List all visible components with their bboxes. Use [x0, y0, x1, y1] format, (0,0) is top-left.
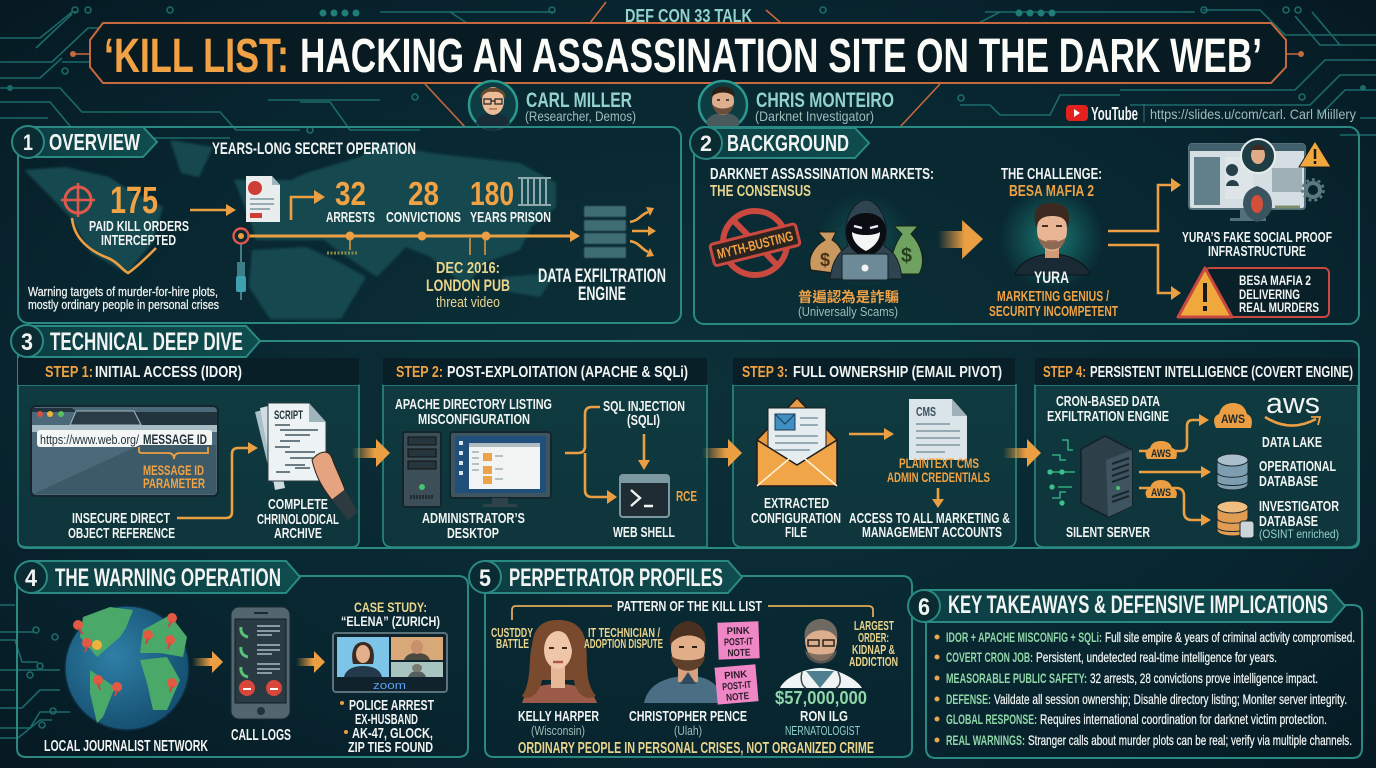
arrow: step 1 to step 2: [352, 439, 390, 467]
stat: arrests: ARRESTS: [326, 209, 375, 226]
label: ron ilg: NERNATOLOGIST: [785, 723, 860, 738]
label: insecure direct object reference: OBJECT REFERENCE: [68, 525, 175, 542]
icon: myth-busting stamp: [710, 211, 800, 275]
label: rce: RCE: [676, 488, 697, 505]
label: operational database: OPERATIONAL: [1259, 458, 1336, 475]
step 3 heading: STEP 3:: [742, 364, 788, 381]
label: administrators desktop: [422, 510, 525, 542]
label: ron ilg: [785, 708, 860, 738]
icon: cms document: [909, 399, 967, 460]
heading: the challenge: BESA MAFIA 2: [1009, 183, 1094, 200]
label: investigator database: DATABASE: [1259, 513, 1318, 530]
label: administrators desktop: DESKTOP: [447, 525, 499, 542]
portrait: kelly harper: [522, 620, 597, 703]
heading: the challenge: THE CHALLENGE:: [1001, 166, 1102, 183]
stat: convictions: 28: [408, 175, 439, 212]
label: extracted configuration file: FILE: [785, 524, 807, 541]
section tab: technical deep dive: [11, 325, 260, 357]
label: data exfiltration engine: ENGINE: [578, 284, 626, 305]
section tab: technical deep dive: 3: [21, 329, 33, 356]
label: it technician: IT TECHNICIAN /: [588, 626, 660, 640]
text: warning targets: Warning targets of murder-for-hire plots,: [28, 284, 218, 299]
list item: covert cron job: [934, 649, 1277, 665]
section tab: perpetrator profiles: [469, 561, 742, 593]
icon: browser url: PARAMETER: [143, 475, 205, 491]
label: local journalist network: LOCAL JOURNALIST NETWORK: [44, 738, 208, 755]
section tab: background: BACKGROUND: [727, 130, 849, 156]
arrow: aws to data lake: [1139, 414, 1209, 451]
icon: aws cloud: [1146, 441, 1177, 460]
list item: idor: [934, 629, 1355, 645]
timeline: [234, 228, 580, 255]
portrait: yura: YURA: [1034, 268, 1069, 287]
label: fake social proof: [1182, 229, 1332, 260]
icon: browser url: MESSAGE ID: [143, 431, 207, 447]
label: data exfiltration engine: DATA EXFILTRATION: [538, 266, 666, 287]
arrow: to fake infrastructure: [1108, 178, 1181, 231]
icon: aws cloud: [1146, 480, 1177, 499]
list item: global response: GLOBAL RESPONSE:: [946, 711, 1037, 727]
section tab: key takeaways: 6: [918, 594, 930, 621]
icon: investigator database: [1217, 501, 1254, 538]
label: web shell: WEB SHELL: [613, 524, 675, 541]
section tab: warning operation: [15, 561, 300, 593]
talk label: DEF CON 33 TALK: [625, 6, 752, 26]
youtube link: YouTube: [1091, 104, 1138, 124]
portrait: yura: [1000, 186, 1104, 290]
label: fake social proof: INFRASTRUCTURE: [1208, 243, 1306, 260]
label: marketing genius: MARKETING GENIUS /: [997, 288, 1110, 305]
label: christopher pence: CHRISTOPHER PENCE: [629, 708, 747, 725]
label: extracted configuration file: CONFIGURATION: [751, 510, 841, 527]
note: pink post-it: [717, 621, 760, 660]
arrow: step 3 to step 4: [1003, 439, 1041, 467]
list: case outcomes: ZIP TIES FOUND: [348, 739, 433, 756]
stat: convictions: [386, 175, 461, 226]
stat: 175 kill orders: [89, 180, 189, 249]
note: pink post-it: NOTE: [726, 691, 750, 704]
arrow: to real murders: [1108, 245, 1181, 300]
label: complete chronological archive: COMPLETE: [268, 496, 328, 513]
icon: document: [246, 176, 280, 222]
label: largest order: ADDICTION: [849, 655, 898, 669]
label: apache misconfiguration: [395, 396, 552, 428]
section tab: background: [690, 127, 869, 159]
heading: darknet markets: THE CONSENSUS: [710, 183, 811, 200]
arrow: to operational database: [1139, 466, 1211, 478]
step 2 heading: [396, 364, 688, 381]
label: insecure direct object reference: INSECURE DIRECT: [72, 510, 170, 527]
icon: zoom call: [333, 633, 447, 692]
icon: aws cloud: AWS: [1151, 487, 1171, 499]
conclusion: ordinary people: ORDINARY PEOPLE IN PERSONAL CRISES, NOT ORGANIZED CRIME: [518, 740, 874, 757]
icon: hooded hacker with money bags: $: [901, 245, 912, 267]
alert: real murders: REAL MURDERS: [1239, 299, 1319, 315]
label: it technician: [584, 626, 663, 651]
heading: the challenge: [1001, 166, 1102, 200]
icon: silent server: [1081, 436, 1132, 517]
list item: covert cron job: Persistent, undetected real-time intelligence for years.: [1036, 649, 1277, 665]
icon: browser url: [31, 406, 218, 496]
section tab: overview: OVERVIEW: [49, 129, 140, 155]
label: largest order: ORDER:: [858, 631, 889, 645]
label: cron engine: CRON-BASED DATA: [1056, 393, 1160, 410]
icon: hooded hacker with money bags: $: [820, 250, 830, 270]
speaker: Carl Miller: CARL MILLER: [526, 89, 632, 112]
label: cron engine: [1047, 393, 1169, 425]
section tab: overview: [12, 126, 157, 158]
section tab: technical deep dive: TECHNICAL DEEP DIVE: [50, 328, 243, 356]
section tab: overview: 1: [23, 130, 33, 155]
arrow: globe to phone: [192, 651, 223, 673]
icon: aws cloud: AWS: [1221, 412, 1245, 426]
note: pink post-it: POST-IT: [722, 680, 752, 693]
stat: years prison: 180: [470, 175, 514, 212]
panel: overview: [12, 126, 681, 323]
panel: perpetrator profiles: [469, 561, 912, 757]
label: it technician: ADOPTION DISPUTE: [584, 637, 663, 651]
icon: aws cloud: AWS: [1151, 448, 1171, 460]
stat: 175 kill orders: 175: [110, 180, 158, 222]
arrow: aws to investigator database: [1139, 488, 1211, 526]
stat: years prison: YEARS PRISON: [470, 209, 551, 226]
step 1 heading: STEP 1:: [45, 364, 93, 381]
heading: pattern of the kill list: [512, 598, 873, 620]
arrow: idor to archive: [177, 442, 258, 518]
stat: years prison: [470, 175, 551, 226]
step 2 heading: STEP 2:: [396, 364, 443, 381]
label: kelly harper: [518, 708, 599, 738]
label: investigator database: (OSINT enriched): [1259, 527, 1339, 541]
label: apache misconfiguration: APACHE DIRECTORY LISTING: [395, 396, 552, 413]
list: case outcomes: [340, 697, 434, 756]
text: warning targets: [28, 284, 219, 312]
card: step 1: [18, 358, 359, 547]
label: apache misconfiguration: MISCONFIGURATION: [418, 411, 530, 428]
icon: email envelope: [757, 398, 837, 486]
label: universally scams: (Universally Scams): [798, 304, 898, 319]
label: plaintext credentials: ADMIN CREDENTIALS: [887, 469, 990, 485]
speaker: Carl Miller: (Researcher, Demos): [525, 108, 636, 124]
icon: target crosshair and outline: [61, 183, 156, 273]
label: universally scams: 普遍認為是詐騙: [798, 289, 899, 305]
icon: zoom call: zoom: [373, 680, 406, 692]
label: administrators desktop: ADMINISTRATOR’S: [422, 510, 525, 527]
label: ron ilg: RON ILG: [800, 708, 848, 725]
card: step 3: [733, 358, 1016, 547]
arrow: credentials down: [932, 488, 944, 508]
label: marketing genius: [989, 288, 1118, 320]
icon: operational database: [1217, 454, 1248, 490]
portrait: ron ilg: [780, 619, 862, 688]
note: pink post-it: PINK: [727, 626, 751, 637]
arrows: exfiltration: [630, 207, 656, 257]
label: data lake: DATA LAKE: [1262, 434, 1322, 451]
label: largest order: KIDNAP &: [852, 643, 895, 657]
label: operational database: [1259, 458, 1336, 490]
icon: phone call logs: [231, 607, 290, 719]
speaker: Chris Monteiro: [699, 81, 894, 130]
label: christopher pence: (Ulah): [674, 723, 702, 738]
portrait: christopher pence: [644, 621, 724, 703]
icon: fake social proof monitor: [1189, 139, 1331, 222]
card: step 4: [352, 358, 1358, 547]
note: pink post-it: PINK: [724, 669, 748, 682]
icon: admin desktop computer: [403, 432, 551, 507]
icon: web shell: [620, 475, 669, 517]
arrow: step 2 to step 3: [702, 439, 742, 467]
icon: browser url: https://www.web.org/: [40, 432, 139, 447]
icon: browser url: MESSAGE ID: [143, 462, 204, 478]
world map backdrop: [24, 140, 556, 319]
label: kelly harper: KELLY HARPER: [518, 708, 599, 725]
list item: idor: IDOR + APACHE MISCONFIG + SQLi:: [946, 629, 1102, 645]
list item: defense: DEFENSE:: [946, 691, 991, 707]
alert: real murders: [1178, 268, 1329, 317]
icon: script papers with hand: SCRIPT: [274, 408, 303, 422]
icon: script papers with hand: [255, 403, 358, 520]
label: kelly harper: (Wisconsin): [531, 723, 585, 738]
label: christopher pence: [629, 708, 747, 738]
step 3 heading: FULL OWNERSHIP (EMAIL PIVOT): [793, 364, 1002, 381]
heading: case study: [341, 599, 440, 629]
label: extracted configuration file: EXTRACTED: [764, 495, 829, 512]
step 3 heading: [742, 364, 1002, 381]
panel: warning operation: [15, 561, 468, 757]
icon: cms document: CMS: [916, 404, 936, 419]
stat: arrests: 32: [335, 175, 366, 212]
label: complete chronological archive: CHRINOLODICAL: [257, 511, 339, 528]
section tab: perpetrator profiles: PERPETRATOR PROFILES: [509, 564, 723, 592]
section tab: perpetrator profiles: 5: [479, 565, 491, 592]
icon: circuit fragments: [1048, 440, 1075, 505]
label: investigator database: INVESTIGATOR: [1259, 498, 1339, 515]
label: plaintext credentials: PLAINTEXT CMS: [899, 455, 979, 471]
logo: aws: aws: [1266, 388, 1320, 420]
arrow: sql to shell: [638, 434, 650, 470]
icon: myth-busting stamp: MYTH-BUSTING: [715, 228, 795, 262]
label: insecure direct object reference: [68, 510, 175, 542]
arrow: elbow to stats: [291, 190, 325, 220]
youtube link: [1066, 104, 1356, 124]
label: sql injection: SQL INJECTION: [603, 398, 685, 415]
label: custody battle: [491, 626, 533, 651]
label: access to accounts: ACCESS TO ALL MARKETING &: [849, 510, 1010, 527]
alert: real murders: DELIVERING: [1239, 286, 1300, 302]
heading: pattern of the kill list: PATTERN OF THE KILL LIST: [617, 598, 762, 615]
callout: london pub: LONDON PUB: [426, 276, 510, 295]
label: complete chronological archive: ARCHIVE: [274, 525, 322, 542]
list item: real warnings: REAL WARNINGS:: [946, 732, 1025, 748]
list item: covert cron job: COVERT CRON JOB:: [946, 649, 1033, 665]
note: pink post-it: NOTE: [727, 648, 751, 659]
section tab: background: 2: [700, 131, 712, 156]
arrow: [190, 204, 236, 216]
step 1 heading: [45, 364, 242, 381]
step 1 heading: INITIAL ACCESS (IDOR): [95, 364, 242, 381]
stat: convictions: CONVICTIONS: [386, 209, 461, 226]
figure: order amount: $57,000,000: [775, 688, 867, 708]
label: complete chronological archive: [257, 496, 339, 542]
label: silent server: SILENT SERVER: [1066, 524, 1150, 541]
heading: case study: “ELENA” (ZURICH): [341, 613, 440, 629]
stat: 175 kill orders: INTERCEPTED: [101, 232, 176, 249]
list: case outcomes: AK-47, GLOCK,: [352, 725, 433, 742]
list item: global response: [934, 711, 1327, 727]
arrow: brace to sql and shell: [565, 407, 617, 504]
icon: aws cloud: [1214, 403, 1252, 428]
list item: public safety: MEASORABLE PUBLIC SAFETY:: [946, 670, 1087, 686]
label: custody battle: BATTLE: [496, 637, 529, 651]
title banner: ‘KILL LIST:: [104, 30, 289, 83]
label: extracted configuration file: [751, 495, 841, 541]
heading: darknet markets: DARKNET ASSASSINATION MARKETS:: [710, 166, 934, 183]
subheading: years-long operation: YEARS-LONG SECRET OPERATION: [212, 139, 416, 158]
panel: key takeaways: [908, 590, 1362, 758]
list: case outcomes: POLICE ARREST: [349, 697, 434, 714]
step 2 heading: POST-EXPLOITATION (APACHE & SQLi): [447, 364, 688, 381]
panel: technical deep dive: [11, 325, 1362, 758]
title banner: [70, 2, 1304, 127]
note: pink post-it: POST-IT: [724, 636, 753, 648]
stat: arrests: [326, 175, 375, 226]
label: universally scams: [798, 289, 899, 319]
callout: london pub: DEC 2016:: [436, 260, 500, 277]
label: data exfiltration engine: [538, 266, 666, 305]
label: plaintext credentials: [887, 455, 990, 485]
label: call logs: CALL LOGS: [231, 727, 291, 744]
label: access to accounts: MANAGEMENT ACCOUNTS: [862, 524, 1002, 541]
label: largest order: [849, 619, 898, 669]
label: largest order: LARGEST: [854, 619, 894, 633]
list item: public safety: [934, 670, 1318, 686]
stat: 175 kill orders: PAID KILL ORDERS: [89, 218, 189, 235]
card: step 2: [383, 358, 707, 547]
list: case outcomes: EX-HUSBAND: [355, 711, 418, 728]
label: sql injection: (SQLI): [627, 412, 660, 429]
youtube link: https://slides.u/com/carl. Carl Miillery: [1150, 106, 1356, 122]
arrow: config to cms: [849, 428, 894, 440]
icon: hooded hacker with money bags: [810, 192, 922, 288]
label: cron engine: EXFILTRATION ENGINE: [1047, 408, 1169, 425]
speaker: Chris Monteiro: (Darknet Investigator): [755, 108, 874, 124]
section tab: warning operation: 4: [25, 565, 38, 592]
speaker: Carl Miller: [469, 81, 636, 130]
alert: real murders: BESA MAFIA 2: [1239, 272, 1311, 288]
panel: background: [690, 127, 1359, 324]
label: access to accounts: [849, 510, 1010, 541]
step 4 heading: STEP 4:: [1043, 364, 1086, 381]
speaker: Chris Monteiro: CHRIS MONTEIRO: [756, 89, 894, 112]
label: investigator database: [1259, 498, 1339, 541]
icon: server stack: [584, 206, 626, 258]
label: operational database: DATABASE: [1259, 473, 1318, 490]
note: pink post-it: [715, 664, 759, 705]
icon: globe with pins: [65, 606, 189, 730]
icon: usb probe: [236, 244, 246, 300]
callout: london pub: threat video: [436, 294, 500, 311]
arrow: phone to case study: [296, 651, 325, 673]
heading: darknet markets: [710, 166, 934, 200]
heading: case study: CASE STUDY:: [354, 599, 427, 615]
section tab: warning operation: THE WARNING OPERATION: [55, 564, 281, 592]
label: custody battle: CUSTDDY: [491, 626, 533, 640]
label: marketing genius: SECURITY INCOMPETENT: [989, 303, 1118, 320]
arrow: big: [938, 220, 983, 259]
label: sql injection: [603, 398, 685, 429]
callout: london pub: [426, 260, 510, 311]
text: warning targets: mostly ordinary people in personal crises: [28, 297, 219, 312]
